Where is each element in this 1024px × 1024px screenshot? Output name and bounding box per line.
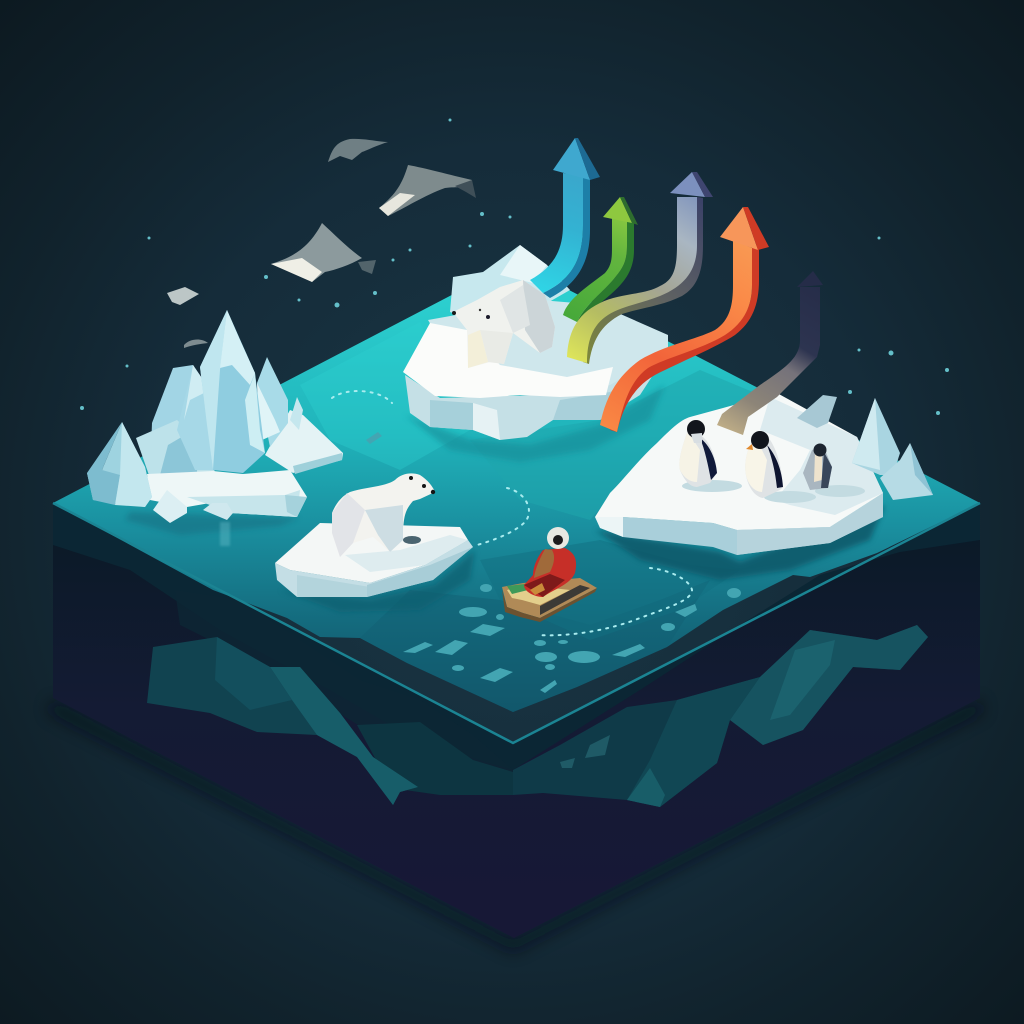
- rear mound: [150, 365, 215, 475]
- figure head: [547, 527, 569, 549]
- block shadow: [48, 700, 983, 952]
- right spire: [257, 357, 288, 447]
- floe reflection: back floe: [405, 385, 665, 462]
- arrow: cyan: [530, 138, 600, 298]
- iceberg: right small: [852, 398, 933, 500]
- icon: small ice shard right floe: [797, 395, 837, 428]
- figure face: [553, 535, 563, 545]
- main spire: [200, 310, 265, 473]
- icon: penguin 1: [679, 420, 717, 487]
- side facets: [430, 400, 473, 430]
- floe reflection: right floe: [595, 505, 885, 580]
- far left spike: [87, 422, 152, 507]
- icon: polar bear front: [332, 473, 435, 557]
- deep water layer left: [175, 590, 513, 790]
- ice floe: bear floe front: [275, 523, 473, 597]
- icon: floating ice shards: [167, 139, 476, 348]
- base plate: [147, 470, 307, 517]
- side facet right: [737, 493, 883, 555]
- floe side: [595, 493, 883, 555]
- dark water band: [53, 503, 980, 770]
- floe reflection: front floe: [280, 550, 475, 612]
- second spire: [177, 365, 215, 470]
- ocean top surface: [53, 262, 980, 712]
- block sides: [53, 503, 980, 938]
- chunk small: [203, 503, 233, 520]
- water facets right: [470, 370, 760, 520]
- particles: snow: [80, 118, 949, 415]
- icon: polar bear back: [452, 280, 555, 368]
- arrows: rising trend lines: [530, 138, 769, 432]
- ice floe: right with penguins: [595, 393, 883, 555]
- light water facets: [300, 322, 470, 470]
- water facets centre: [480, 540, 740, 640]
- floe reflection: iceberg: [125, 512, 300, 535]
- right wing of base: [265, 410, 343, 473]
- block rim: [53, 503, 980, 743]
- arrow: faded brown: [717, 271, 823, 435]
- top shading: [760, 397, 883, 515]
- iceberg: left mountain: [87, 310, 343, 523]
- floe top: [403, 323, 613, 398]
- icon: penguin 2: [745, 431, 783, 498]
- underwater ice right: [513, 625, 928, 807]
- chunk front: [153, 490, 187, 523]
- iceberg reflection streak: [220, 522, 230, 546]
- underwater ice left: [147, 637, 418, 805]
- figure body: [524, 548, 576, 597]
- sled deck: [502, 578, 597, 618]
- penguin shadows: [682, 480, 865, 503]
- side facet front: [595, 517, 623, 537]
- floe top: [595, 393, 883, 530]
- ice floes in water: [366, 432, 741, 693]
- floe side base: [405, 352, 668, 440]
- icon: penguin 3: [803, 444, 832, 490]
- arrow: green: [563, 197, 638, 322]
- side facets light: [473, 403, 500, 440]
- dim water patch left: [357, 722, 513, 795]
- back berg: [450, 245, 570, 330]
- ice floe: centre back: [403, 245, 668, 440]
- arrow: orange: [600, 207, 769, 432]
- panel: ocean block: [53, 262, 980, 938]
- back plate: [428, 300, 668, 400]
- water facets front: [360, 580, 710, 712]
- dotted route lines: [332, 391, 692, 635]
- icon: sled with explorer: [502, 527, 597, 622]
- arrow: grey blue: [567, 172, 713, 364]
